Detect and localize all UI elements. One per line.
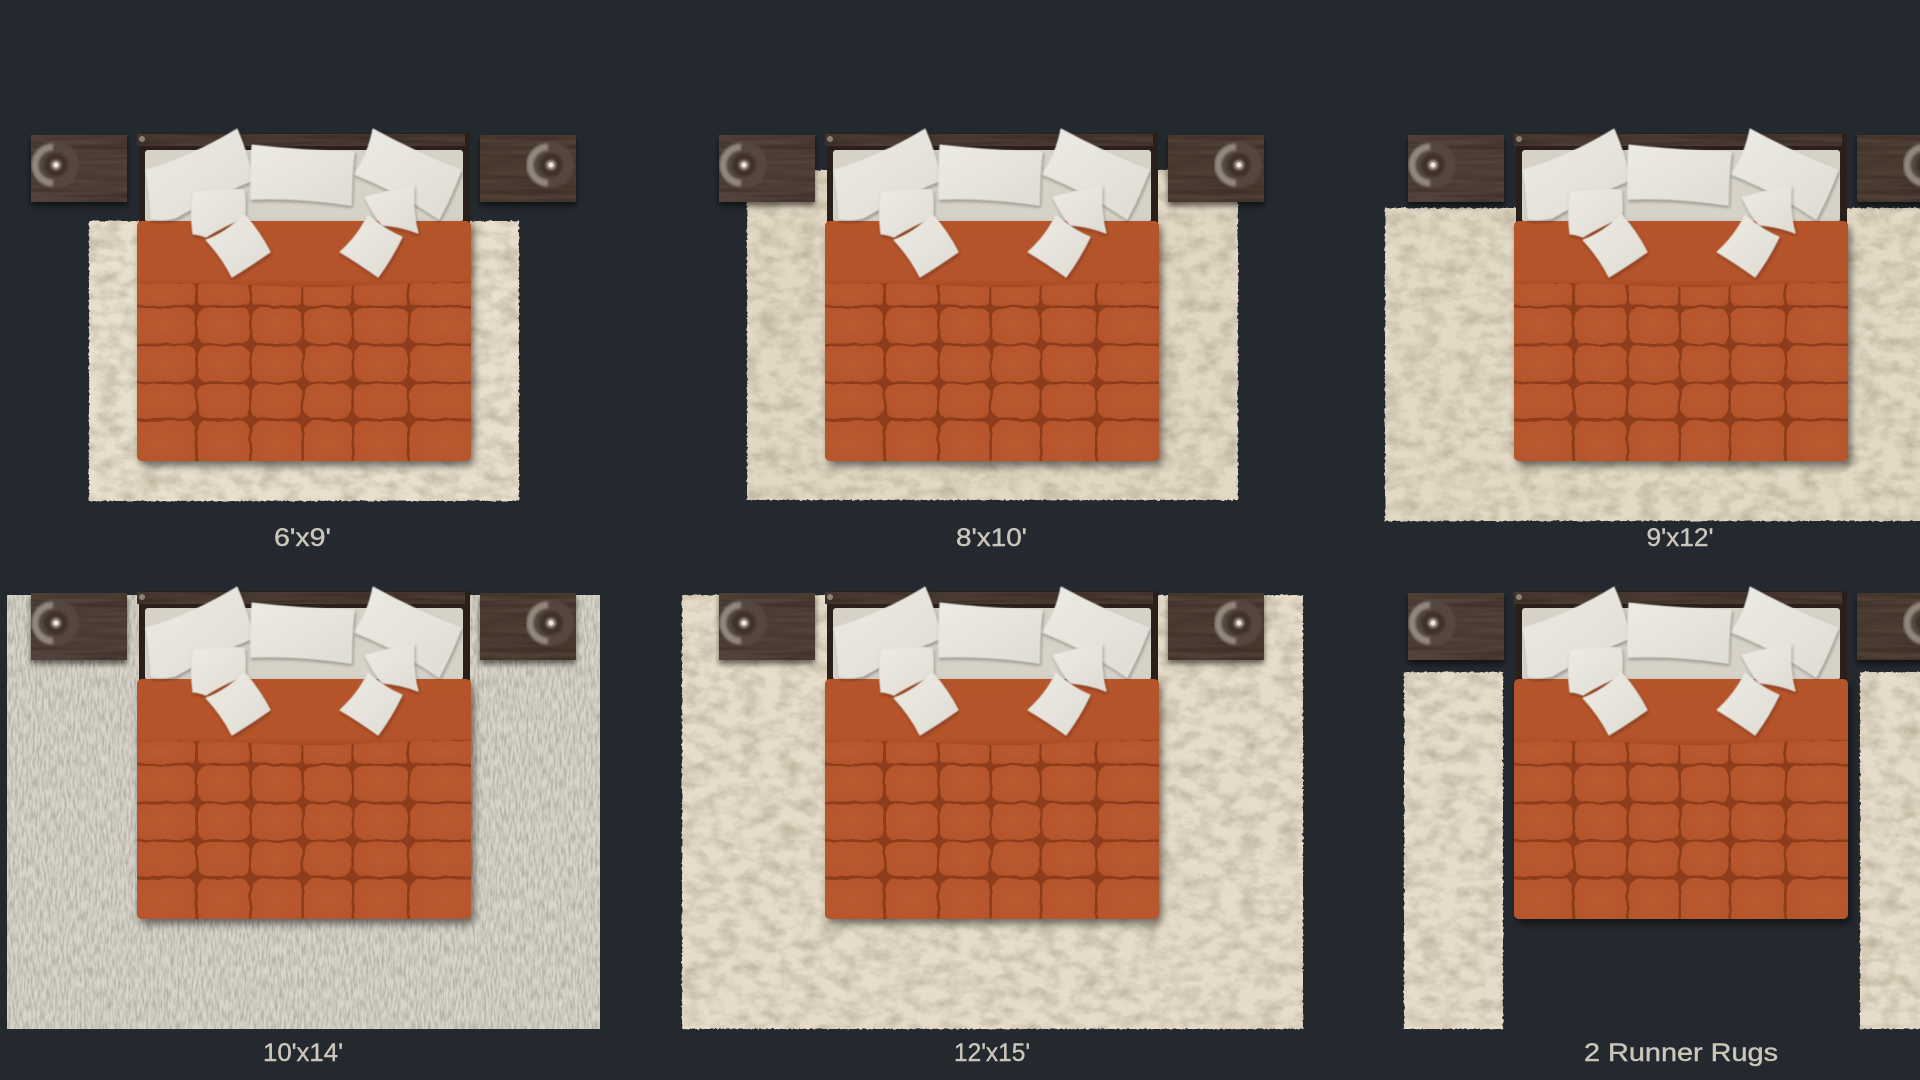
nightstand left with lamp — [31, 593, 127, 660]
label: 8'x10': 8'x10' — [956, 524, 1027, 552]
label: 12'x15': 12'x15' — [954, 1039, 1030, 1067]
quilted orange duvet — [818, 679, 1167, 928]
headboard and sheet — [825, 591, 1158, 681]
nightstand right with lamp — [1857, 593, 1920, 660]
quilted orange duvet — [1507, 679, 1856, 928]
nightstand right with lamp — [1857, 135, 1920, 202]
quilted orange duvet — [130, 221, 479, 470]
pillows — [1523, 587, 1838, 735]
quilted orange duvet — [1507, 221, 1856, 470]
bed layout — [1408, 129, 1920, 470]
pillows — [1523, 129, 1838, 277]
nightstand left with lamp — [1408, 135, 1504, 202]
pillows — [146, 129, 461, 277]
nightstand right with lamp — [480, 593, 576, 660]
pillows — [834, 587, 1149, 735]
rug: 9x12 — [1385, 208, 1920, 521]
panel: 10'x14' rug — [7, 587, 600, 1067]
rug: 12x15 — [682, 595, 1303, 1029]
nightstand right with lamp — [1168, 135, 1264, 202]
nightstand left with lamp — [1408, 593, 1504, 660]
runner rug left — [1404, 672, 1503, 1029]
headboard and sheet — [137, 591, 470, 681]
panel: 9'x12' rug — [1385, 129, 1920, 552]
rug: 8x10 — [747, 170, 1238, 500]
panel: 6'x9' rug — [31, 129, 576, 552]
label: 6'x9': 6'x9' — [274, 524, 331, 552]
label: 10'x14': 10'x14' — [263, 1039, 343, 1067]
panel: 2 runner rugs — [1404, 587, 1920, 1067]
panel: 8'x10' rug — [719, 129, 1264, 552]
quilted orange duvet — [130, 679, 479, 928]
headboard and sheet — [137, 133, 470, 223]
nightstand right with lamp — [1168, 593, 1264, 660]
panel: 12'x15' rug — [682, 587, 1303, 1067]
label: 9'x12': 9'x12' — [1646, 524, 1714, 552]
pillows — [834, 129, 1149, 277]
quilted orange duvet — [818, 221, 1167, 470]
bed layout — [31, 129, 576, 470]
nightstand left with lamp — [719, 135, 815, 202]
bed layout — [1408, 587, 1920, 928]
bed layout — [719, 587, 1264, 928]
nightstand right with lamp — [480, 135, 576, 202]
rug: 6x9 — [89, 221, 519, 501]
headboard and sheet — [825, 133, 1158, 223]
bed layout — [719, 129, 1264, 470]
headboard and sheet — [1514, 133, 1847, 223]
nightstand left with lamp — [31, 135, 127, 202]
headboard and sheet — [1514, 591, 1847, 681]
rug: 10x14 ribbed — [7, 595, 600, 1029]
label: 2 Runner Rugs: 2 Runner Rugs — [1584, 1039, 1778, 1067]
bed layout — [31, 587, 576, 928]
pillows — [146, 587, 461, 735]
runner rug right — [1860, 672, 1920, 1029]
nightstand left with lamp — [719, 593, 815, 660]
